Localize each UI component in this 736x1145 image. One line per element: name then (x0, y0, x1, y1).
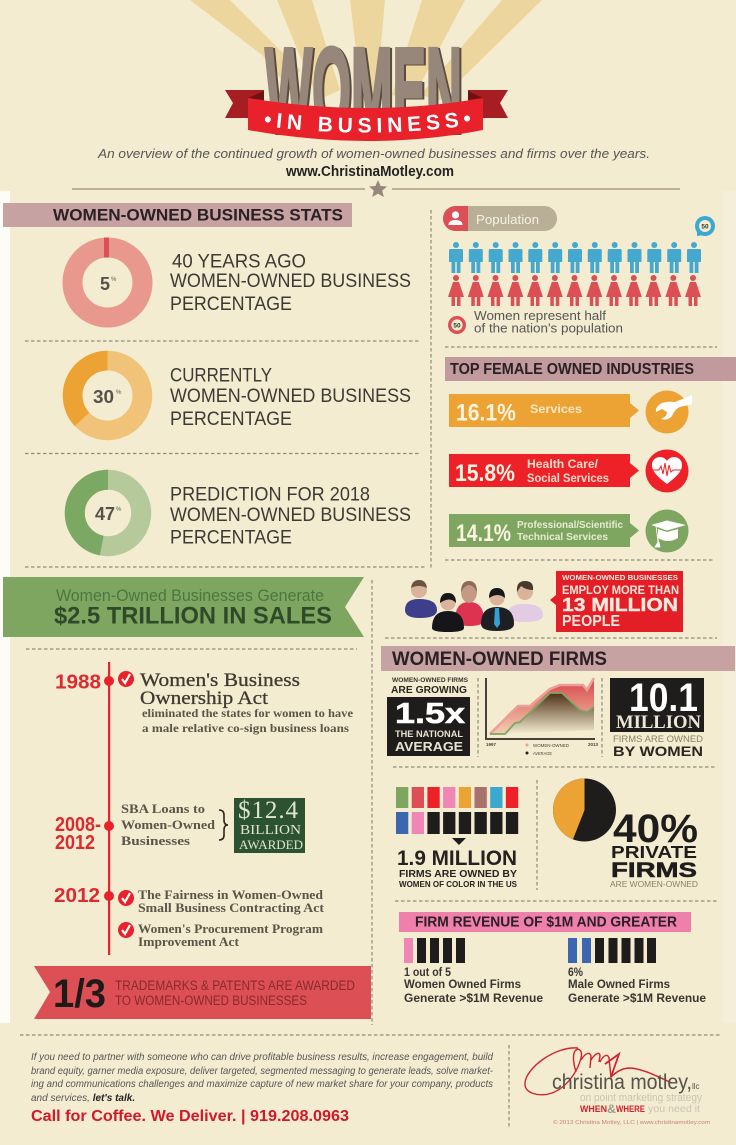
heading: women-owned firms: WOMEN-OWNED FIRMS (392, 649, 607, 670)
stat: 1.5x national average (387, 677, 470, 756)
industry bar: professional: Technical Services (517, 531, 608, 543)
industry bar: services: 16.1% (456, 400, 516, 426)
donut: 30 percent: % (116, 390, 122, 396)
timeline: 1988: Ownership Act (140, 688, 269, 709)
heading: women-owned business stats (3, 203, 352, 227)
logo: christina motley (525, 1048, 710, 1126)
timeline: 1988: Women's Business (140, 670, 300, 691)
timeline: 2012 (54, 885, 325, 949)
industry bar: health care (449, 454, 639, 487)
revenue text: women: Generate >$1M Revenue (404, 993, 543, 1005)
donut: 47 percent: % (116, 507, 122, 513)
footer paragraph: brand equity, garner media exposure, deliver targeted, segmented messaging to generate leads, solve market- (31, 1066, 494, 1077)
population pill (443, 206, 557, 231)
timeline: 2008-2012 (55, 801, 228, 854)
logo: christina motley: llc (692, 1082, 700, 1091)
website: www.ChristinaMotley.com (285, 164, 454, 180)
area chart (486, 678, 599, 756)
ribbon: 2.5 trillion in sales (3, 577, 364, 637)
stat: 1.5x national average: ARE GROWING (391, 684, 467, 696)
awarded box: $12.4 (238, 797, 298, 824)
timeline: 2012: 2012 (54, 885, 100, 907)
stat: 10.1 million firms (610, 676, 704, 759)
ribbon: one third trademarks (34, 966, 371, 1019)
label: currently: CURRENTLY (170, 364, 272, 386)
stat: 1.9 million firms: 1.9 MILLION (397, 847, 517, 870)
revenue text: men (568, 967, 706, 1005)
industry bar: health care: Health Care/ (527, 459, 599, 471)
timeline: 2008-2012: SBA Loans to (121, 801, 205, 816)
revenue text: men: 6% (568, 967, 583, 979)
timeline: 2012: Improvement Act (138, 934, 240, 949)
label: 40 years ago: 40 YEARS AGO (172, 250, 306, 272)
population caption: Women represent half (474, 309, 607, 323)
stat: 40 percent private firms: FIRMS (611, 859, 697, 882)
header divider with star (72, 180, 680, 197)
footer paragraph: and services, let's talk. (31, 1093, 135, 1104)
stat: 1.5x national average: WOMEN-OWNED FIRMS (392, 677, 469, 684)
logo: christina motley: christina motley, (552, 1071, 692, 1094)
revenue text: women: 1 out of 5 (404, 967, 452, 979)
donut: 47 percent: 47 (95, 504, 115, 524)
badge: 50 red (448, 316, 466, 334)
stat: 1.9 million firms (397, 847, 517, 889)
timeline axis (104, 662, 114, 955)
ribbon: 2.5 trillion in sales: Women-Owned Businesses Generate (56, 587, 324, 605)
infographic canvas: WOMEN (265, 22, 462, 158)
pictogram: men (449, 242, 701, 273)
timeline: 2012: Women's Procurement Program (138, 921, 323, 936)
pictogram: women (448, 275, 701, 306)
stat: 10.1 million firms: 10.1 (629, 676, 698, 720)
label: prediction for 2018 (170, 484, 411, 548)
footer paragraph: If you need to partner with someone who can drive profitable business results, increase engagement, build (31, 1052, 493, 1063)
callout: 13 million people (550, 571, 683, 632)
revenue pictogram: men (568, 938, 656, 963)
ribbon: one third trademarks: TRADEMARKS & PATENTS ARE AWARDED (115, 978, 355, 993)
timeline: 2008-2012: Businesses (121, 833, 190, 848)
donut: 5 percent: 5 (100, 274, 110, 294)
label: prediction for 2018: PERCENTAGE (170, 526, 292, 548)
logo: christina motley: © 2013 Christina Motley, LLC | www.christinamotley.com (553, 1119, 710, 1126)
awarded box: BILLION (240, 823, 301, 838)
infographic canvas: WOMEN (267, 23, 464, 159)
heading: women-owned firms (381, 646, 735, 671)
area chart: WOMEN-OWNED (533, 743, 570, 748)
timeline: 2008-2012: 2012 (55, 832, 95, 854)
heading: top female owned industries: TOP FEMALE OWNED INDUSTRIES (450, 361, 694, 378)
callout: 13 million people: PEOPLE (562, 613, 620, 630)
footer paragraph: ing and communications challenges and maximize capture of new market share for your company, products (31, 1079, 493, 1090)
ribbon: one third trademarks: 1/3 (53, 972, 106, 1016)
timeline: 2008-2012: 2008- (55, 814, 101, 836)
subtitle: An overview of the continued growth of women-owned businesses and firms over the years. (97, 147, 650, 161)
revenue text: women: Women Owned Firms (404, 979, 521, 991)
revenue text: men: Generate >$1M Revenue (568, 993, 706, 1005)
icon: heart (646, 450, 688, 492)
revenue pictogram: women (404, 938, 465, 963)
stat: 40 percent private firms: ARE WOMEN-OWNED (610, 879, 698, 889)
timeline: 2012: Small Business Contracting Act (138, 900, 325, 915)
awarded box (234, 797, 305, 853)
label: currently: WOMEN-OWNED BUSINESS (170, 385, 411, 407)
label: 40 years ago: WOMEN-OWNED BUSINESS (170, 270, 411, 292)
area chart: AVERAGE (533, 751, 552, 756)
industry bar: health care: Social Services (527, 473, 609, 485)
badge: 50 blue: 50 (701, 224, 709, 230)
stat: 10.1 million firms: BY WOMEN (613, 743, 703, 759)
stat: 40 percent private firms (610, 807, 698, 889)
awarded box: AWARDED (239, 838, 303, 852)
label: prediction for 2018: PREDICTION FOR 2018 (170, 484, 370, 506)
donut: 5 percent: % (111, 277, 117, 283)
ribbon: 2.5 trillion in sales: $2.5 TRILLION IN SALES (54, 602, 332, 630)
label: 40 years ago (170, 250, 411, 315)
people illustration (405, 580, 543, 632)
call to action: Call for Coffee. We Deliver. | 919.208.0963 (31, 1108, 349, 1125)
heading: women-owned business stats: WOMEN-OWNED BUSINESS STATS (53, 206, 343, 224)
logo: christina motley: WHERE (616, 1104, 645, 1114)
stat: 1.9 million firms: FIRMS ARE OWNED BY (399, 869, 517, 880)
label: prediction for 2018: WOMEN-OWNED BUSINESS (170, 504, 411, 526)
heading: top female owned industries (445, 357, 736, 381)
stat: 40 percent private firms: 40% (613, 807, 698, 851)
callout: 13 million people: 13 MILLION (562, 595, 678, 615)
industry bar: health care: 15.8% (455, 460, 515, 487)
industry bar: professional: Professional/Scientific (517, 519, 623, 531)
industry bar: professional: 14.1% (456, 520, 511, 547)
badge: 50 red: 50 (453, 322, 461, 330)
area chart: 1997 (486, 742, 497, 747)
population pill: Population (476, 212, 539, 227)
industry bar: services (449, 394, 639, 427)
donut: 30 percent: 30 (93, 387, 114, 407)
badge: 50 blue (695, 216, 715, 236)
stat: 1.9 million firms: WOMEN OF COLOR IN THE US (399, 879, 517, 889)
callout: 13 million people: WOMEN-OWNED BUSINESSES (562, 573, 678, 582)
stat: 1.5x national average: THE NATIONAL (395, 729, 463, 740)
title banner: in business (225, 90, 508, 141)
revenue text: men: Male Owned Firms (568, 979, 670, 991)
stat: 1.5x national average: 1.5x (395, 698, 465, 730)
timeline: 1988: eliminated the states for women to have (142, 708, 353, 720)
heading: firm revenue: FIRM REVENUE OF $1M AND GREATER (415, 914, 677, 930)
timeline: 1988 (55, 670, 353, 735)
logo: christina motley: you need it (648, 1103, 700, 1115)
logo: christina motley: WHEN (580, 1104, 607, 1114)
stat: 40 percent private firms: PRIVATE (611, 842, 697, 862)
timeline: 1988: a male relative co-sign business loans (142, 723, 350, 735)
donut: 5 percent (72, 238, 142, 318)
population caption: of the nation's population (474, 322, 623, 336)
label: 40 years ago: PERCENTAGE (170, 293, 292, 315)
title banner: in business: •IN BUSINESS• (264, 112, 470, 133)
population caption (474, 309, 623, 336)
timeline: 1988: 1988 (55, 672, 101, 694)
donut: 30 percent (73, 361, 142, 430)
stat: 10.1 million firms: MILLION (616, 712, 701, 733)
label: currently: PERCENTAGE (170, 408, 292, 430)
title: WOMEN (265, 22, 464, 159)
footer paragraph (31, 1052, 494, 1104)
timeline: 2008-2012: Women-Owned (121, 817, 216, 832)
stat: 1.5x national average: AVERAGE (395, 740, 463, 754)
donut: 47 percent (75, 480, 141, 546)
icon: graduation cap (646, 510, 688, 552)
icon: wrench (646, 390, 692, 434)
sunburst rays (190, 0, 542, 100)
ribbon: one third trademarks: TO WOMEN-OWNED BUSINESSES (115, 993, 307, 1008)
logo: christina motley: on point marketing strategy (580, 1092, 702, 1104)
revenue text: women (404, 967, 543, 1005)
area chart: 2013 (588, 742, 599, 747)
callout: 13 million people: EMPLOY MORE THAN (562, 585, 679, 597)
label: currently (170, 364, 411, 430)
color squares pictogram (396, 787, 518, 845)
pie chart (553, 778, 616, 842)
industry bar: services: Services (530, 404, 582, 416)
industry bar: professional (449, 514, 639, 547)
logo: christina motley: & (607, 1102, 616, 1116)
timeline: 2012: The Fairness in Women-Owned (138, 887, 324, 902)
stat: 10.1 million firms: FIRMS ARE OWNED (613, 734, 703, 745)
